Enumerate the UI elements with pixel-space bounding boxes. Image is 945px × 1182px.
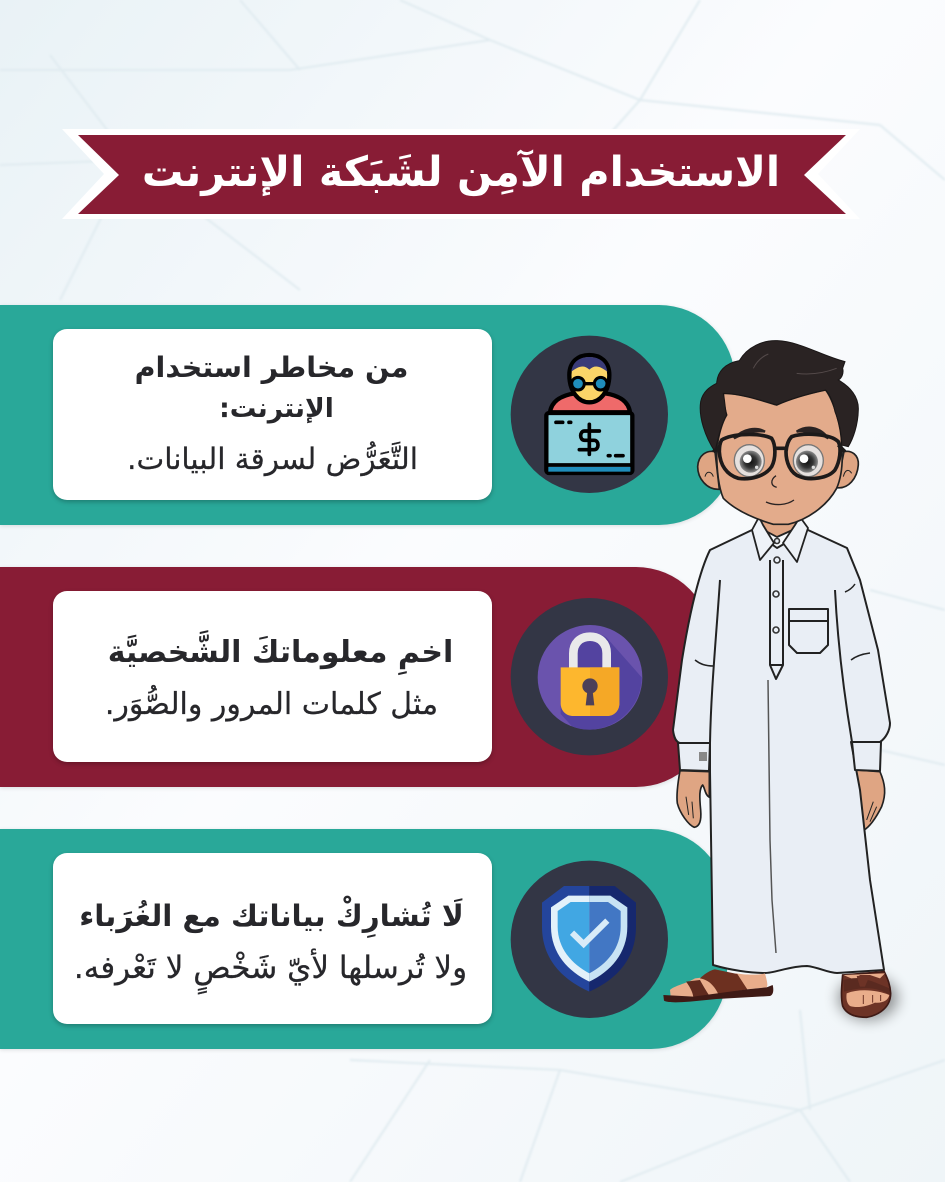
- head: [698, 341, 858, 524]
- thobe body: [673, 530, 890, 973]
- eyes: [734, 445, 823, 477]
- hands: [677, 770, 885, 831]
- heading line 2: الإنترنت:: [219, 393, 334, 424]
- panel: do not share data with strangers: [0, 829, 728, 1051]
- nose and mouth: [766, 476, 794, 505]
- glasses: [713, 434, 845, 479]
- icon: security shield: [510, 860, 668, 1018]
- icon: hacker with laptop: [510, 336, 668, 493]
- card: strangers text: [53, 853, 492, 1024]
- body text: ولا تُرسلها لأيّ شَخْصٍ لا تَعْرفه.: [74, 950, 467, 986]
- character: boy in thobe: [663, 340, 906, 1028]
- hair: [700, 341, 858, 452]
- collar and neck: [752, 515, 808, 562]
- title banner: [62, 129, 846, 219]
- panel: protect personal information: [0, 567, 694, 789]
- body text: مثل كلمات المرور والصُّوَر.: [105, 687, 438, 722]
- icon: padlock: [510, 598, 668, 756]
- sandals and feet: [663, 969, 891, 1017]
- heading line 1: من مخاطر استخدام: [135, 351, 408, 384]
- card: data theft text: [53, 329, 492, 500]
- eyebrows: [734, 428, 828, 438]
- buttons: [773, 538, 780, 633]
- heading: لَا تُشارِكْ بياناتك مع الغُرَباء: [79, 899, 464, 933]
- panel band: maroon: [0, 567, 712, 787]
- heading: اخمِ معلوماتكَ الشَّخصيَّة: [108, 635, 453, 670]
- panel band: teal: [0, 829, 727, 1049]
- title text: الاستخدام الآمِن لشَبَكة الإنترنت: [142, 148, 780, 196]
- ears: [698, 451, 858, 489]
- panel: internet risks: [0, 305, 734, 527]
- card: personal information text: [53, 591, 492, 762]
- face: [717, 390, 842, 524]
- body text: التَّعَرُّض لسرقة البيانات.: [127, 442, 418, 476]
- panel band: teal: [0, 305, 735, 525]
